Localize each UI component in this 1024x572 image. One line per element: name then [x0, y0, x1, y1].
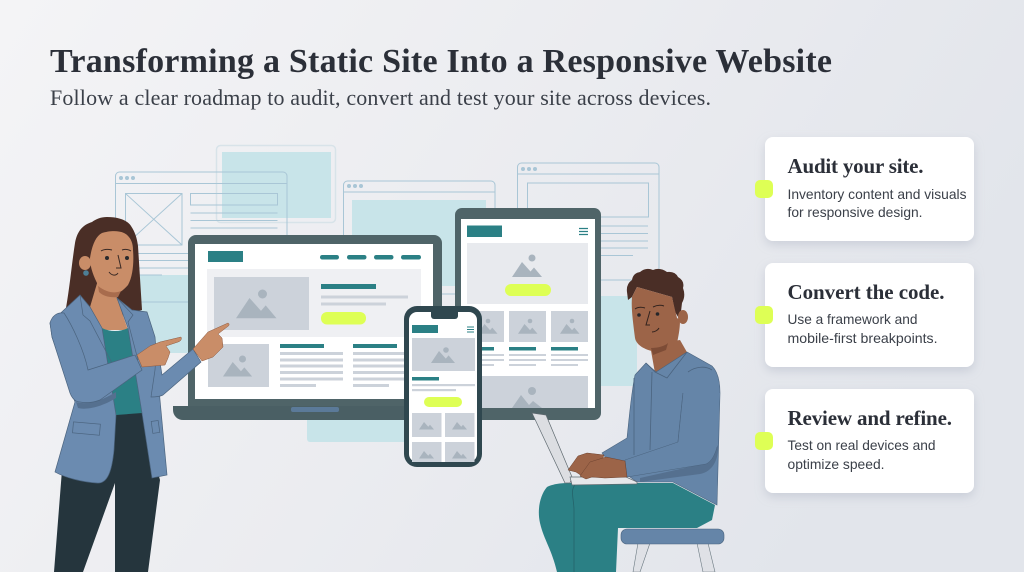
- laptop screen: [195, 244, 433, 399]
- phone: [404, 306, 482, 467]
- step description: Test on real devices and: [788, 437, 936, 453]
- hair: [627, 269, 684, 320]
- step heading: Review and refine.: [788, 406, 952, 430]
- sleeve: [625, 393, 720, 477]
- blazer right front: [117, 298, 167, 478]
- neck and chest: [90, 280, 128, 330]
- near sleeve: [50, 313, 142, 403]
- trousers: [54, 413, 160, 572]
- phone screen: [409, 312, 477, 462]
- sleeve shadow: [76, 392, 116, 409]
- step marker: [755, 306, 773, 324]
- tablet screen: [461, 219, 595, 408]
- ear and earring: [79, 256, 91, 276]
- phone body: [404, 306, 482, 467]
- step description: Use a framework and: [788, 311, 918, 327]
- step card: convert: [755, 263, 974, 367]
- facial features: [101, 249, 131, 275]
- jaw shadow: [651, 343, 668, 355]
- background teal block under laptop: [307, 415, 412, 442]
- step description: [788, 186, 966, 220]
- pointing hand far: [193, 323, 229, 361]
- pointing hand near: [137, 337, 181, 367]
- background wireframe: right window: [518, 163, 659, 386]
- face: [90, 231, 133, 294]
- title: Transforming a Static Site Into a Responsive Website: [50, 43, 832, 80]
- shirt: [602, 352, 720, 505]
- tablet: [455, 208, 601, 420]
- laptop on lap: [532, 413, 637, 485]
- step description: Inventory content and visuals: [788, 186, 966, 202]
- teal top: [102, 328, 142, 415]
- trousers: [539, 483, 715, 572]
- woman presenter: [50, 217, 229, 572]
- facial features: [635, 305, 664, 332]
- face: [632, 287, 680, 351]
- background wireframe: teal panel window: [216, 146, 336, 222]
- neck shadow: [98, 286, 121, 297]
- tablet body: [455, 208, 601, 420]
- background wireframe: image and text window: [116, 172, 287, 353]
- step description: optimize speed.: [788, 456, 884, 472]
- step marker: [755, 180, 773, 198]
- step card: audit: [755, 137, 974, 241]
- far sleeve: [151, 343, 201, 397]
- step heading: Audit your site.: [788, 154, 924, 178]
- step marker: [755, 432, 773, 450]
- laptop base: [173, 406, 470, 420]
- hands on keyboard: [568, 453, 627, 479]
- step description: mobile-first breakpoints.: [788, 330, 938, 346]
- blazer: [50, 295, 201, 483]
- step heading: Convert the code.: [788, 280, 944, 304]
- neck: [650, 340, 688, 373]
- shirt details: [634, 352, 712, 455]
- step description: [788, 311, 938, 346]
- laptop body: [188, 235, 442, 406]
- blazer left front: [50, 295, 116, 483]
- laptop: [173, 235, 470, 420]
- subtitle: Follow a clear roadmap to audit, convert and test your site across devices.: [50, 85, 711, 110]
- ear: [678, 310, 688, 324]
- man with laptop: [532, 269, 724, 572]
- step card: review: [755, 389, 974, 493]
- step description: [788, 437, 936, 472]
- hair: [66, 217, 142, 322]
- sleeve shadow: [640, 445, 718, 482]
- step description: for responsive design.: [788, 204, 922, 220]
- background wireframe: centre window: [344, 181, 495, 294]
- stool: [621, 529, 724, 572]
